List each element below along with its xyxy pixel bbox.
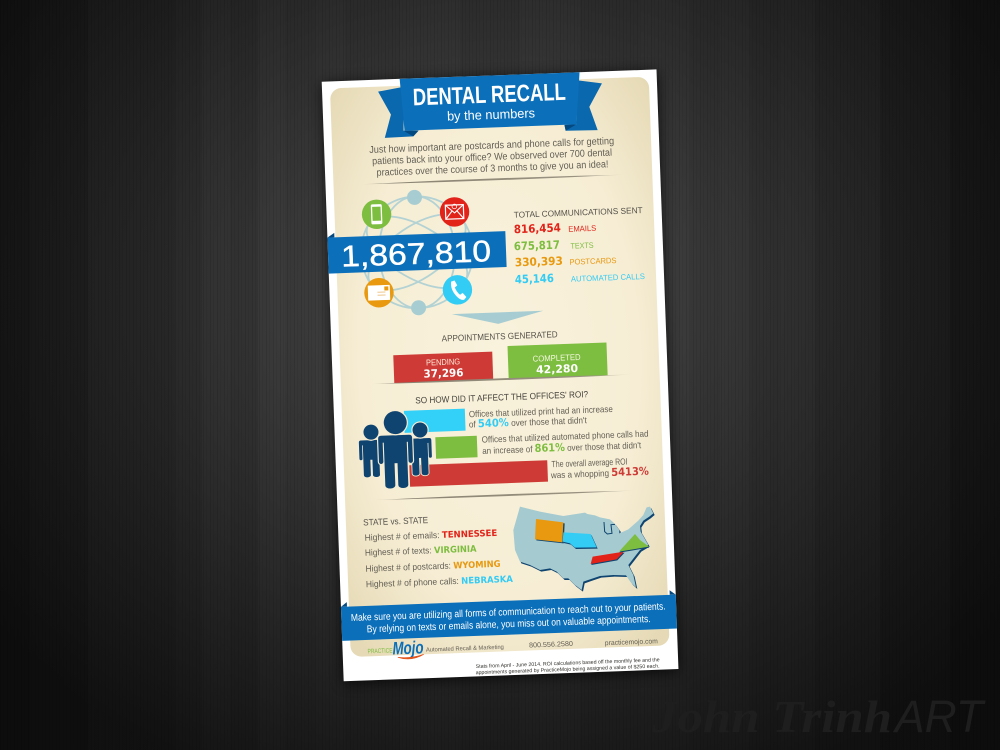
great lakes outline (604, 522, 615, 534)
intro text: patients back into your office? We observed over 700 dental (372, 148, 612, 167)
ribbon tails (378, 79, 604, 138)
fine print (475, 657, 660, 676)
automated calls: 45,146 (515, 271, 554, 286)
icon: postcard (364, 278, 394, 308)
ROI bar: average (409, 460, 548, 487)
ROI text: calls: Offices that utilized automated phone calls had (481, 429, 649, 445)
state: Virginia (619, 534, 649, 553)
ROI text: print: Offices that utilized print had an increase (469, 404, 613, 419)
ROI text: print: of 540% over those that didn't (469, 413, 587, 431)
completed bar: COMPLETED (533, 352, 581, 364)
ROI text: average: The overall average ROI (551, 456, 628, 469)
total banner (327, 227, 507, 274)
banner text: Make sure you are utilizing all forms of communication to reach out to your patients. (351, 601, 666, 624)
icon: email envelope (439, 197, 470, 227)
call to action banner: By relying on texts or emails alone, you miss out on valuable appointments. (367, 614, 651, 635)
map depth (515, 508, 655, 592)
postcards: POSTCARDS (569, 256, 617, 267)
cream panel (330, 77, 670, 657)
footer phone: 800.556.2580 (529, 641, 573, 649)
intro text: Just how important are postcards and phone calls for getting (369, 136, 614, 156)
ROI text: average: was a whopping 5413% (550, 465, 649, 481)
title ribbon (378, 71, 604, 138)
card drop shadow (322, 72, 679, 684)
state heading: STATE vs. STATE (363, 515, 428, 527)
pending bar: 37,296 (423, 366, 464, 381)
card paper (322, 69, 678, 681)
pending bar: PENDING (426, 356, 460, 368)
texts state: Highest # of texts: VIRGINIA (365, 544, 477, 559)
call to action banner (341, 590, 677, 641)
footer logo: PRACTICE (367, 647, 393, 655)
ribbon main (400, 72, 581, 131)
ROI text: calls (481, 429, 649, 457)
watermark (651, 691, 986, 742)
completed bar: 42,280 (536, 362, 579, 377)
state: Wyoming (535, 519, 565, 543)
emails: EMAILS (568, 224, 596, 234)
ROI text: average (549, 456, 649, 481)
icon: smartphone (361, 199, 392, 230)
texts (514, 236, 594, 253)
map of the United States (513, 507, 655, 592)
postcards state: Highest # of postcards: WYOMING (365, 559, 501, 575)
pending bar (393, 352, 493, 383)
title: DENTAL RECALL (412, 79, 566, 111)
footer logo (367, 637, 424, 660)
automated calls (515, 268, 645, 286)
globe nodes (407, 190, 426, 316)
icon: people (358, 410, 433, 490)
phone calls state: Highest # of phone calls: NEBRASKA (366, 574, 513, 590)
footer site: practicemojo.com (605, 638, 658, 647)
state: Nebraska (563, 532, 598, 549)
fine print: Stats from April - June 2014. ROI calculations based off the monthly fee and the (476, 657, 660, 670)
footer logo: Mojo (392, 637, 424, 658)
watermark: ART (892, 691, 986, 742)
infographic card (322, 69, 678, 681)
emails state: Highest # of emails: TENNESSEE (364, 528, 497, 544)
ROI bar: calls (435, 436, 478, 459)
arrow down (452, 311, 544, 326)
legend heading: TOTAL COMMUNICATIONS SENT (514, 205, 643, 220)
watermark: John Trinh (651, 691, 892, 742)
appointments heading: APPOINTMENTS GENERATED (442, 329, 558, 343)
state vs state list (363, 512, 513, 590)
ROI heading: SO HOW DID IT AFFECT THE OFFICES' ROI? (415, 389, 588, 405)
fine print: appointments generated by PracticeMojo being assigned a value of $250 each. (476, 664, 660, 676)
map land (513, 507, 653, 590)
emails (514, 219, 596, 236)
subtitle: by the numbers (447, 105, 536, 124)
emails: 816,454 (514, 221, 561, 236)
postcards: 330,393 (515, 254, 563, 269)
footer tagline: Automated Recall & Marketing (426, 645, 504, 654)
texts: 675,817 (514, 238, 560, 253)
intro text: practices over the course of 3 months to give you an idea! (376, 159, 609, 179)
ROI text: print (468, 404, 613, 431)
icon: phone handset (442, 275, 473, 305)
network globe graphic (353, 188, 481, 318)
total number: 1,867,810 (341, 235, 492, 274)
texts: TEXTS (570, 241, 594, 251)
total communications legend (512, 205, 645, 286)
state: Tennessee (591, 552, 625, 565)
completed bar (508, 342, 608, 379)
postcards (515, 252, 617, 269)
automated calls: AUTOMATED CALLS (571, 272, 645, 284)
ROI bar: print (404, 409, 466, 433)
ROI text: calls: an increase of 861% over those that didn't (482, 438, 642, 457)
intro text (369, 136, 615, 179)
